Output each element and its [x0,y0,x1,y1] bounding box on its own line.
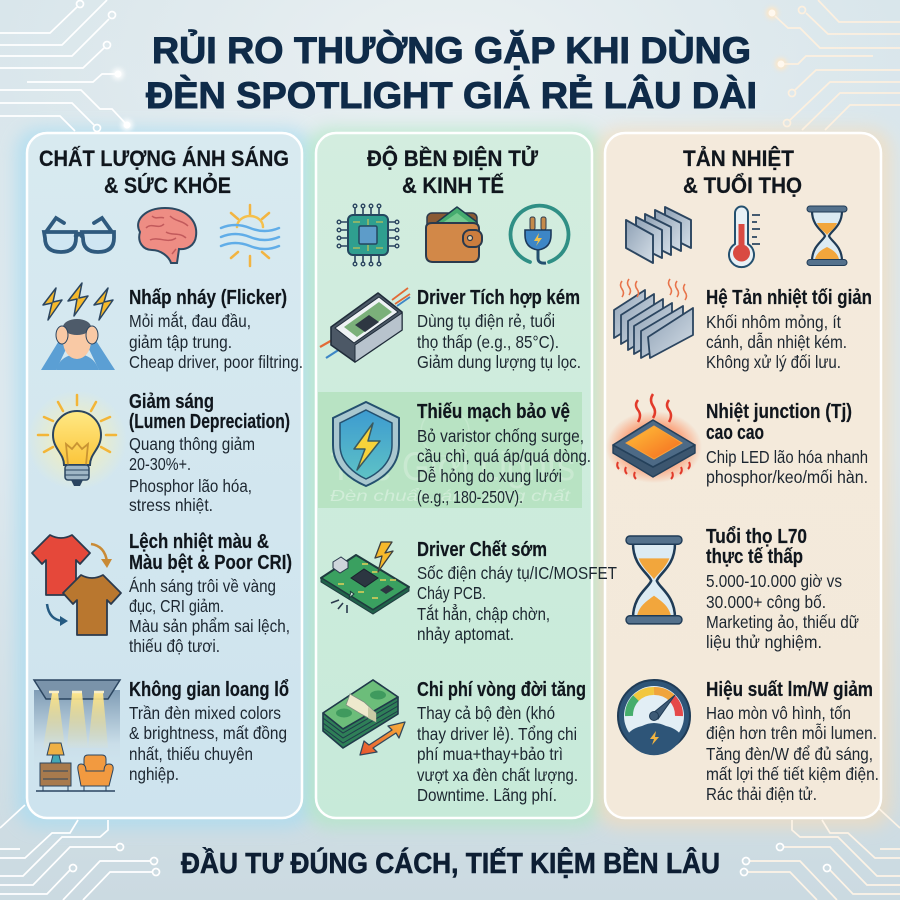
icon: hot heat sink [614,279,693,358]
text: junction temperature: Nhiệt junction (Tj) [706,401,852,423]
item: no protection [333,401,591,507]
icon: sun and waves [221,205,279,266]
icon: room with spotlights [34,680,120,791]
panel: chất lượng ánh sáng & sức khỏe [27,133,303,818]
text: lumen depreciation: stress nhiệt. [129,495,213,515]
item: minimal heat sink [614,279,872,372]
item: color shift [32,531,292,656]
text: early driver death: Driver Chết sớm [417,539,547,561]
text: no protection: Dễ hỏng do xung lưới [417,465,562,486]
text: L70 lifetime: Marketing ảo, thiếu dữ [706,612,859,632]
title: RỦI RO THƯỜNG GẶP KHI DÙNG [152,29,751,71]
title: ĐÈN SPOTLIGHT GIÁ RẺ LÂU DÀI [146,74,757,116]
icon: flicker headache [41,283,115,370]
icon: gauge [618,680,690,755]
icon: driver module [320,288,410,362]
text: no protection: (e.g., 180-250V). [417,487,523,507]
text: life cycle cost [417,679,586,805]
icon: cash stack and arrows [323,680,405,755]
title [146,29,757,116]
heading: panel 2: & KINH TẾ [402,173,504,198]
text: junction temperature: cao cao [706,422,764,444]
text: efficiency: mất lợi thế tiết kiệm điện. [706,764,879,784]
text: color shift: Ánh sáng trôi về vàng [129,576,276,596]
icon: hot LED chip [606,394,702,483]
icon: thermometer [729,207,760,267]
text: patchy space: Trần đèn mixed colors [129,703,281,723]
text: minimal heat sink: Không xử lý đối lưu. [706,352,841,372]
text: flicker [129,287,303,372]
heading: panel 3: & TUỔI THỌ [683,173,802,198]
icon: heat sink fins [626,207,691,263]
text: lumen depreciation: Phosphor lão hóa, [129,476,252,496]
heading: panel 1: CHẤT LƯỢNG ÁNH SÁNG [39,146,289,171]
text: no protection: cầu chì, quá áp/quá dòng. [417,446,591,466]
text: efficiency: Hiệu suất lm/W giảm [706,679,873,701]
text: junction temperature: Chip LED lão hóa nhanh [706,447,868,467]
text: patchy space: Không gian loang lổ [129,679,289,701]
text: no protection [417,401,591,507]
icon: wallet [426,207,482,262]
text: L70 lifetime: thực tế thấp [706,546,803,568]
icon: plug [510,206,568,263]
text: efficiency: Hao mòn vô hình, tốn [706,703,851,723]
text: L70 lifetime: 5.000-10.000 giờ vs [706,571,842,591]
text: lumen depreciation: Giảm sáng [129,391,214,413]
text: poor driver [417,287,581,372]
text: patchy space [129,679,289,784]
text: lumen depreciation [129,391,290,515]
circuit traces: top right [766,0,900,130]
text: patchy space: & brightness, mất đồng [129,723,287,743]
text: patchy space: nhất, thiếu chuyên [129,744,253,764]
icon: circuit chip [337,204,399,266]
text: poor driver: thọ thấp (e.g., 85°C). [417,332,559,352]
item: life cycle cost [323,679,586,805]
text: efficiency: điện hơn trên mỗi lumen. [706,722,877,743]
text: poor driver: Giảm dung lượng tụ lọc. [417,352,581,372]
text: no protection: Bỏ varistor chống surge, [417,426,584,446]
text: early driver death: nhảy aptomat. [417,624,514,644]
icon: shirts with arrows [32,535,121,635]
text: color shift: Màu sản phẩm sai lệch, [129,616,290,636]
heading: panel 3: TẢN NHIỆT [683,146,795,171]
text: minimal heat sink: cánh, dẫn nhiệt kém. [706,331,847,352]
text: life cycle cost: Thay cả bộ đèn (khó [417,703,555,723]
text: early driver death [417,539,617,644]
footer slogan: ĐẦU TƯ ĐÚNG CÁCH, TIẾT KIỆM BỀN LÂU [181,848,720,880]
text: color shift: Lệch nhiệt màu & [129,531,269,553]
text: life cycle cost: vượt xa đèn chất lượng. [417,765,578,785]
text: L70 lifetime: liệu thử nghiệm. [706,632,822,652]
icon: burnt circuit board [321,542,409,614]
text: L70 lifetime: Tuổi thọ L70 [706,526,807,548]
text: flicker: Nhấp nháy (Flicker) [129,287,287,309]
text: color shift: thiếu độ tươi. [129,636,220,656]
icon: glasses [44,218,114,252]
item: junction temperature [606,394,868,487]
text: life cycle cost: thay driver lẻ). Tổng chi [417,724,577,744]
heading: panel 2: ĐỘ BỀN ĐIỆN TỬ [367,146,539,171]
icon: brain [138,208,196,263]
text: poor driver: Driver Tích hợp kém [417,287,580,309]
text: patchy space: nghiệp. [129,764,179,784]
watermark [318,392,582,508]
text: early driver death: Sốc điện cháy tụ/IC/MOSFET [417,563,617,583]
text: flicker: Cheap driver, poor filtring. [129,352,303,372]
text: flicker: Mỏi mắt, đau đầu, [129,310,251,331]
text: junction temperature: phosphor/keo/mối hàn. [706,467,868,487]
panel: độ bền điện tử & kinh tế [316,133,617,818]
item: lumen depreciation [27,390,290,515]
icon: hourglass large [626,536,682,624]
item: flicker [41,283,303,372]
text: junction temperature [706,401,868,487]
item: patchy space [34,679,289,791]
icon: light bulb [27,390,127,490]
text: L70 lifetime: 30.000+ công bố. [706,592,826,612]
text: life cycle cost: Chi phí vòng đời tăng [417,679,586,701]
text: color shift: Màu bệt & Poor CRI) [129,552,292,574]
text: minimal heat sink: Khối nhôm mỏng, ít [706,312,841,332]
text: color shift: đục, CRI giảm. [129,596,224,616]
heading: panel 2 [367,146,539,198]
text: early driver death: Cháy PCB. [417,583,486,603]
item: efficiency [618,679,879,804]
item: poor driver [320,287,581,372]
circuit traces: bottom right [740,805,900,900]
circuit traces: bottom left [0,805,160,900]
text: poor driver: Dùng tụ điện rẻ, tuổi [417,311,555,331]
text: no protection: Thiếu mạch bảo vệ [417,401,570,423]
text: lumen depreciation: Quang thông giảm [129,434,255,454]
watermark: Đèn chuẩn, ánh sáng chất [330,487,571,505]
text: efficiency [706,679,879,804]
watermark: Thế Giới Lights [330,445,575,489]
panel: tản nhiệt & tuổi thọ [605,133,881,818]
text: lumen depreciation: (Lumen Depreciation) [129,411,290,433]
text: lumen depreciation: 20-30%+. [129,454,191,474]
heading: panel 1: & SỨC KHỎE [104,173,231,198]
icon: hourglass small [807,206,847,266]
text: L70 lifetime [706,526,859,652]
text: minimal heat sink [706,287,872,372]
text: color shift [129,531,292,656]
text: minimal heat sink: Hệ Tản nhiệt tối giản [706,287,872,309]
circuit traces: top left [0,0,133,132]
item: L70 lifetime [626,526,859,652]
text: life cycle cost: Downtime. Lãng phí. [417,785,557,805]
heading: panel 1 [39,146,289,198]
text: flicker: giảm tập trung. [129,332,232,352]
text: efficiency: Rác thải điện tử. [706,784,817,804]
text: life cycle cost: phí mua+thay+bảo trì [417,744,563,764]
heading: panel 3 [683,146,802,198]
text: efficiency: Tăng đèn/W để đủ sáng, [706,744,873,764]
icon: shield [333,402,399,486]
text: early driver death: Tắt hẳn, chập chờn, [417,603,550,624]
item: early driver death [321,539,617,644]
